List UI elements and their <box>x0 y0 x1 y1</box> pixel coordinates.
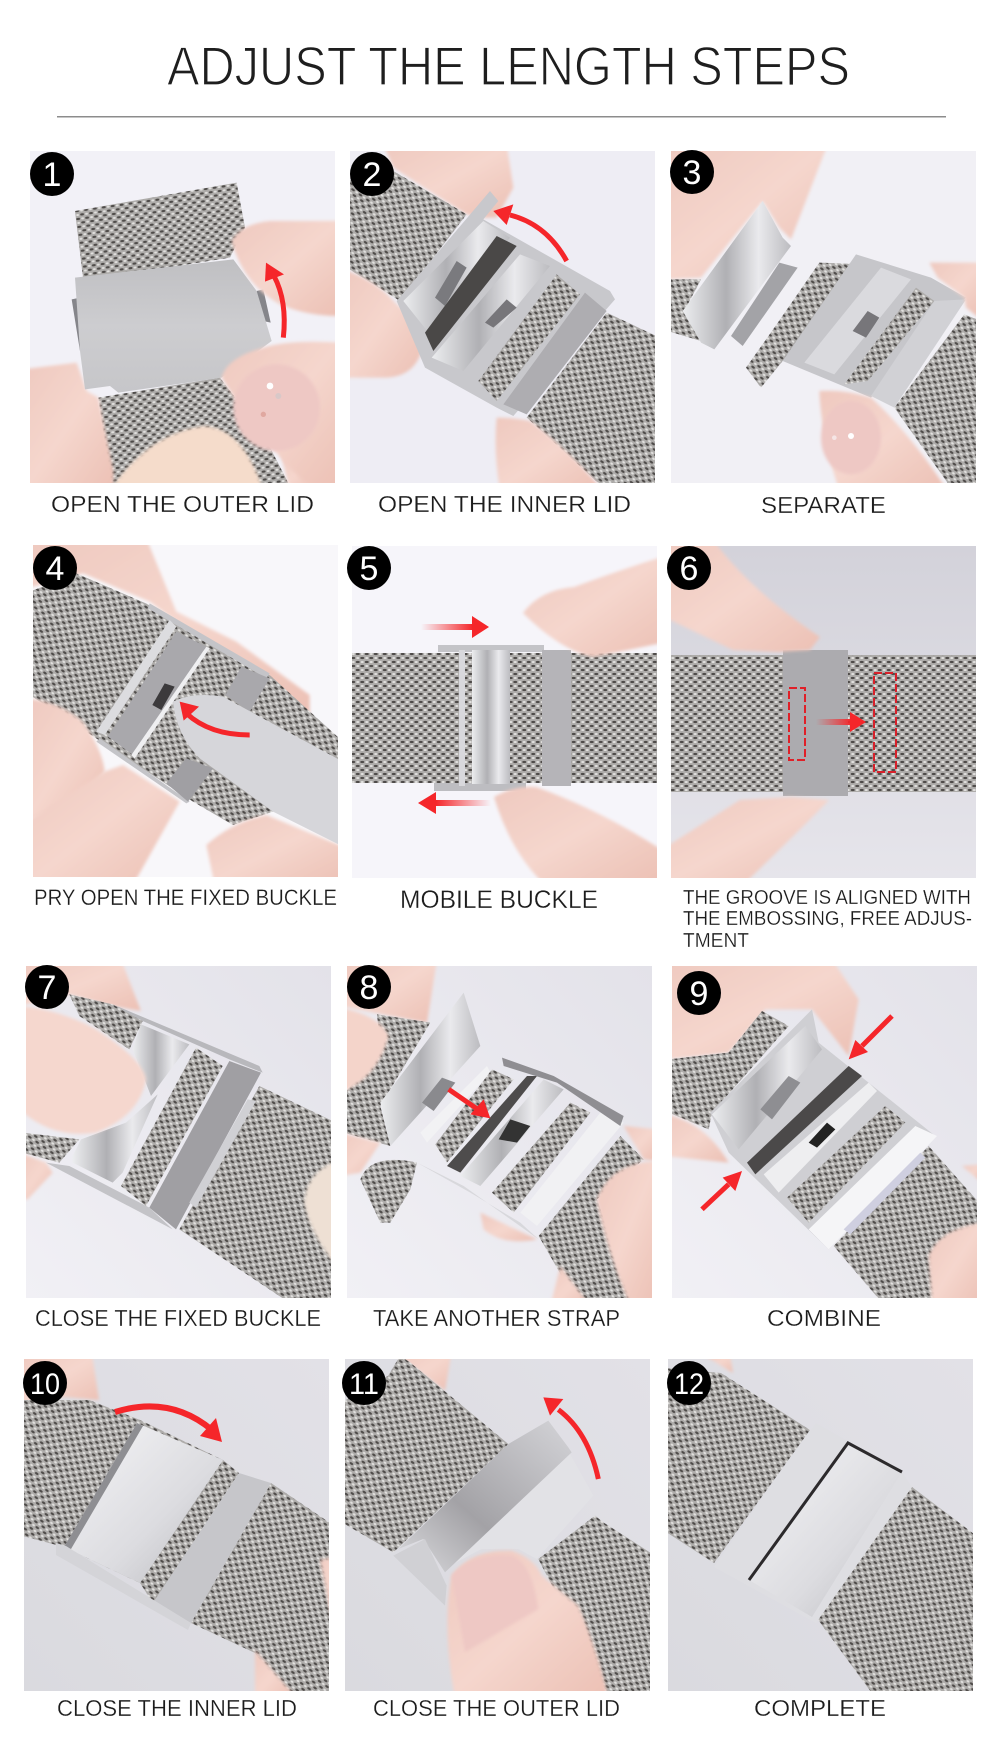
caption 10: CLOSE THE INNER LID <box>57 1695 297 1721</box>
bright strip <box>420 1066 490 1143</box>
arrow: right <box>421 616 489 638</box>
tool blade <box>173 695 343 847</box>
arrow <box>265 263 284 338</box>
hinge slot <box>435 261 467 306</box>
panel: step 8 take another strap <box>340 959 657 1306</box>
base <box>443 1454 593 1569</box>
finger: bottom <box>494 787 662 882</box>
finger: top <box>666 541 820 652</box>
badge 2: 2 <box>363 156 381 194</box>
badge 1: 1 <box>43 156 61 194</box>
panel: step 1 open the outer lid <box>23 151 340 491</box>
panel: step 4 pry open the fixed buckle <box>26 538 343 885</box>
lower strap <box>834 1146 982 1303</box>
finger: bottom right <box>255 1650 295 1696</box>
badge 8 <box>347 965 391 1009</box>
caption 9: COMBINE <box>767 1305 881 1331</box>
gray plate <box>149 1061 261 1229</box>
buckle slot <box>853 311 879 338</box>
badge 7 <box>25 965 69 1009</box>
finger: bottom <box>494 416 598 483</box>
skin: right top <box>624 1126 657 1161</box>
mesh strap <box>671 655 976 792</box>
arrow <box>115 1406 222 1442</box>
mesh strap: lower <box>527 313 660 488</box>
finger: right <box>597 1161 657 1306</box>
buckle plate <box>871 299 966 408</box>
finger: lower right <box>222 342 340 491</box>
finger: bottom <box>819 391 948 491</box>
panel: step 6 groove aligned <box>666 541 976 882</box>
lower plate <box>166 758 213 802</box>
finger: upper right <box>232 221 340 316</box>
panel: step 5 mobile buckle <box>352 546 662 882</box>
right plate <box>153 1473 271 1623</box>
badge 12: 12 <box>674 1368 704 1401</box>
buckle rail: top <box>113 1004 263 1073</box>
buckle mesh <box>844 288 934 384</box>
finger: top left <box>19 1354 99 1403</box>
fingers: top <box>665 959 859 1059</box>
clasp seam <box>749 1443 902 1580</box>
buckle <box>783 254 966 398</box>
plate <box>542 650 571 786</box>
caption 6 <box>683 887 972 952</box>
badge 11: 11 <box>349 1368 379 1401</box>
finger: left <box>340 1008 389 1093</box>
caption 4: PRY OPEN THE FIXED BUCKLE <box>34 885 337 910</box>
arrow: top <box>849 1016 892 1059</box>
mesh: right piece <box>746 262 850 388</box>
lid edge <box>64 1423 143 1549</box>
plate strip <box>189 1099 256 1208</box>
lower strap <box>539 1136 644 1303</box>
lilac strip <box>844 1153 925 1234</box>
mesh strap <box>352 653 657 783</box>
caption 6: THE EMBOSSING, FREE ADJUS- <box>683 908 972 930</box>
badge 5 <box>347 546 391 590</box>
badge 6: 6 <box>680 550 698 588</box>
bright bar <box>432 254 550 371</box>
bright thin bar <box>131 647 210 758</box>
buckle <box>710 1009 935 1249</box>
slot <box>499 1119 530 1143</box>
badge 3: 3 <box>683 154 701 192</box>
inner lid <box>712 1026 822 1149</box>
panel: step 10 close the inner lid <box>19 1354 333 1696</box>
badge 6 <box>667 546 711 590</box>
skin: lower left <box>665 1114 729 1163</box>
finger: top left <box>340 959 437 1023</box>
skin: right edge <box>962 1164 982 1183</box>
badge 11 <box>342 1361 386 1405</box>
lid piece <box>380 993 480 1146</box>
silver bar: lower <box>73 1094 158 1183</box>
loose plate <box>731 263 798 346</box>
mesh band 1 <box>435 1069 514 1163</box>
dashed marker: left <box>789 688 805 760</box>
buckle bars <box>459 650 510 786</box>
badge 3 <box>670 150 714 194</box>
caption 12: COMPLETE <box>754 1695 886 1721</box>
top bar <box>438 645 544 652</box>
caption 5: MOBILE BUCKLE <box>400 886 598 914</box>
finger: top <box>523 557 662 657</box>
buckle lid <box>64 1423 223 1583</box>
ridge strip <box>96 620 176 735</box>
finger: bottom <box>666 797 829 882</box>
badge 5: 5 <box>360 550 378 588</box>
silver bar <box>460 1079 564 1186</box>
central slot <box>485 299 517 328</box>
panel: step 12 complete <box>663 1354 978 1696</box>
panel: step 7 close the fixed buckle <box>19 959 336 1303</box>
arrow <box>816 712 866 732</box>
mesh strap: lower <box>98 378 288 483</box>
caption 1: OPEN THE OUTER LID <box>51 491 314 517</box>
mesh: left piece <box>671 279 701 340</box>
mesh: upper <box>663 1368 810 1563</box>
hand: left <box>23 363 113 491</box>
mesh band <box>787 1106 905 1223</box>
mesh: upper <box>69 994 143 1049</box>
mesh strap: upper <box>347 171 467 301</box>
badge 12 <box>667 1361 711 1405</box>
mesh band 2 <box>447 1076 537 1173</box>
upper plate <box>226 667 270 712</box>
finger: bottom right <box>929 1223 982 1306</box>
buckle side clips <box>72 289 271 351</box>
skin top <box>702 1354 733 1373</box>
skin: lower left <box>340 1133 380 1176</box>
buckle bright bar <box>804 268 911 374</box>
thumb <box>19 1006 146 1134</box>
skin: top <box>19 959 141 1011</box>
mesh strap: right <box>179 1086 336 1303</box>
nail with glitter <box>821 401 881 474</box>
panel: step 9 combine <box>665 959 982 1306</box>
dark mesh strip <box>747 1066 862 1174</box>
hinge <box>393 1539 447 1606</box>
clasp right section <box>749 1443 902 1617</box>
buckle rail: top <box>148 603 270 678</box>
thumb <box>447 1551 608 1699</box>
plate <box>783 650 848 796</box>
mesh: lower <box>538 1516 655 1696</box>
caption 8: TAKE ANOTHER STRAP <box>373 1305 620 1331</box>
mesh strap: upper <box>75 183 245 281</box>
thumb <box>114 424 262 483</box>
mesh band 3 <box>492 1103 590 1213</box>
caption 11: CLOSE THE OUTER LID <box>373 1695 620 1721</box>
badge 1 <box>30 152 74 196</box>
arrow: bottom <box>702 1171 742 1209</box>
badge 4 <box>33 546 77 590</box>
bottom bar <box>434 783 526 791</box>
arrow <box>493 204 567 261</box>
finger: top left <box>664 144 828 279</box>
badge 10: 10 <box>30 1368 60 1401</box>
centre mesh <box>140 1460 239 1603</box>
badge 7: 7 <box>38 969 56 1007</box>
badge 9: 9 <box>690 975 708 1013</box>
mesh strap: lower <box>191 1483 333 1696</box>
mesh: left <box>23 1133 79 1163</box>
finger: left <box>343 269 422 378</box>
badge 8: 8 <box>360 969 378 1007</box>
buckle rail: bottom <box>46 1163 173 1229</box>
finger: right <box>304 1161 336 1266</box>
thumb <box>26 698 105 822</box>
fingers: top <box>26 538 310 718</box>
outer lid <box>398 1421 572 1572</box>
rail: top <box>502 1058 624 1126</box>
inner lid <box>403 221 510 334</box>
left lid piece <box>683 201 791 349</box>
nail <box>452 1555 538 1652</box>
mesh: upper left <box>669 1011 789 1129</box>
caption 2: OPEN THE INNER LID <box>378 491 631 517</box>
caption 7: CLOSE THE FIXED BUCKLE <box>35 1305 321 1331</box>
skin: top <box>395 1352 452 1391</box>
mesh: lower <box>816 1487 978 1696</box>
slot <box>152 683 175 710</box>
buckle rail: lower <box>96 738 190 803</box>
white plate <box>809 1126 937 1249</box>
finger: under buckle <box>480 1213 537 1241</box>
mesh: curved end <box>360 1160 417 1223</box>
finger: top <box>383 144 513 218</box>
arrow <box>543 1397 598 1479</box>
finger: right <box>929 263 981 319</box>
caption 6: TMENT <box>683 930 749 952</box>
dashed marker: right <box>874 673 896 772</box>
white plate <box>520 1113 624 1226</box>
skin: lower left <box>19 1153 53 1199</box>
silver bar: upper <box>133 1024 189 1096</box>
badge 2 <box>350 152 394 196</box>
bright bar <box>764 1083 877 1193</box>
finger: right edge <box>320 1557 333 1627</box>
caption 6: THE GROOVE IS ALIGNED WITH <box>683 887 971 909</box>
panel: step 3 separate <box>664 144 981 491</box>
buckle body <box>397 191 615 416</box>
panel: step 2 open the inner lid <box>343 144 660 491</box>
grey plate <box>108 632 206 755</box>
skin: bottom right corner <box>280 458 307 483</box>
mesh inside buckle <box>478 274 580 401</box>
caption 3: SEPARATE <box>761 492 886 518</box>
arrow: left <box>418 792 491 814</box>
mesh strap lower right <box>894 314 981 488</box>
buckle outer lid <box>75 259 272 393</box>
title: ADJUST THE LENGTH STEPS <box>167 35 850 97</box>
finger: bottom <box>550 1266 590 1306</box>
mesh: left <box>344 1014 430 1146</box>
nail with glitter <box>233 364 320 451</box>
base strip <box>56 1543 191 1630</box>
mesh: upper <box>342 1356 508 1552</box>
mesh strap <box>30 573 343 825</box>
panel: step 11 close the outer lid <box>342 1352 655 1699</box>
finger: bottom right <box>206 815 343 885</box>
mesh strap: upper <box>19 1400 223 1583</box>
badge 10 <box>23 1361 67 1405</box>
dark mesh strip <box>425 236 517 351</box>
centre mesh <box>121 1048 223 1206</box>
arrow <box>449 1089 490 1118</box>
badge 9 <box>677 971 721 1015</box>
slot <box>809 1123 835 1148</box>
grey plate <box>503 293 607 414</box>
palm <box>26 765 180 885</box>
hinge <box>422 1078 455 1111</box>
clasp plate <box>714 1423 912 1623</box>
badge 4: 4 <box>46 550 64 588</box>
rail: bottom <box>417 1163 539 1239</box>
arrow <box>180 702 250 735</box>
hinge detail <box>760 1076 800 1119</box>
